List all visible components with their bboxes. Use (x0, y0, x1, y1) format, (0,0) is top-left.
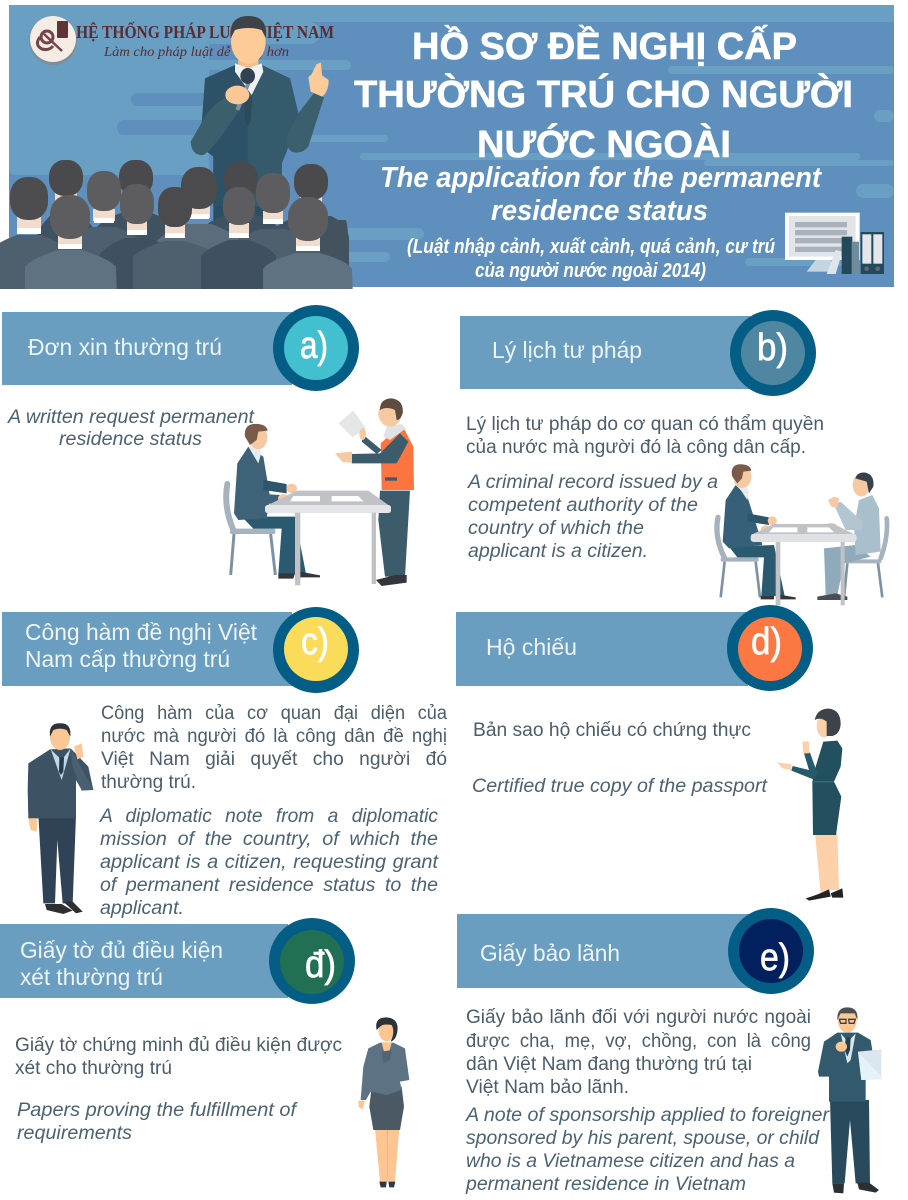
banner d (456, 612, 748, 686)
text b: country of which the (468, 518, 644, 539)
text đ: requirements (17, 1123, 133, 1144)
text c: mission of the country, of which the (100, 829, 438, 850)
badge đ (269, 918, 355, 1004)
logo (29, 16, 334, 65)
heading a: Đơn xin thường trú (28, 334, 222, 360)
badge c: c) (301, 621, 329, 663)
illustration: standing man in suit (28, 723, 93, 914)
text a: residence status (59, 429, 203, 450)
heading b: Lý lịch tư pháp (492, 337, 642, 363)
heading e: Giấy bảo lãnh (480, 940, 620, 966)
logo title: HỆ THỐNG PHÁP LUẬT VIỆT NAM (76, 21, 334, 42)
text c: applicant. (100, 898, 184, 919)
illustration: office interview a (226, 398, 414, 586)
text c: thường trú. (101, 772, 196, 793)
header panel (9, 5, 894, 287)
audience illustration (0, 160, 353, 289)
text e: Giấy bảo lãnh đối với người nước ngoài (466, 1007, 811, 1028)
icon: documents and binders (785, 213, 884, 274)
text c: of permanent residence status to the (100, 875, 438, 896)
panel: d) passport (456, 605, 843, 901)
text a: A written request permanent (7, 407, 255, 428)
audience back row (37, 160, 349, 266)
text e: Việt Nam bảo lãnh. (466, 1077, 629, 1098)
text e: who is a Vietnamese citizen and has a (466, 1151, 795, 1172)
text b: A criminal record issued by a (467, 472, 718, 493)
text d: Certified true copy of the passport (472, 776, 768, 797)
badge b: b) (757, 327, 788, 369)
text e: sponsored by his parent, spouse, or child (466, 1128, 820, 1149)
speaker illustration (191, 16, 329, 220)
text c: nước mà người đó là công dân đề nghị (101, 726, 447, 747)
legal reference: của người nước ngoài 2014) (475, 260, 706, 282)
heading d: Hộ chiếu (486, 634, 577, 660)
panel: đ) eligibility papers (0, 918, 409, 1187)
text b: Lý lịch tư pháp do cơ quan có thẩm quyền (466, 414, 824, 435)
panel: a) written request (2, 305, 414, 586)
heading đ (20, 937, 223, 990)
text e: A note of sponsorship applied to foreigner (465, 1105, 830, 1126)
title: HỒ SƠ ĐỀ NGHỊ CẤP (412, 24, 797, 68)
badge a (273, 305, 359, 391)
heading c (25, 619, 258, 672)
illustration: standing woman in jacket (358, 1017, 409, 1187)
heading đ: Giấy tờ đủ điều kiện (20, 937, 223, 963)
audience front row (25, 184, 353, 289)
text d: Bản sao hộ chiếu có chứng thực (473, 720, 751, 741)
text b: của nước mà người đó là công dân cấp. (466, 437, 806, 458)
legal reference: (Luật nhập cảnh, xuất cảnh, quá cảnh, cư trú (407, 236, 775, 258)
panel: e) note of sponsorship (457, 908, 881, 1195)
text e: được cha, mẹ, vợ, chồng, con là công (466, 1031, 811, 1052)
text c: applicant is a citizen, requesting grant (100, 852, 439, 873)
audience middle row (0, 167, 321, 299)
badge d (727, 605, 813, 691)
banner đ (0, 924, 288, 998)
text a (7, 407, 255, 450)
badge a: a) (300, 325, 328, 367)
badge đ: đ) (305, 944, 336, 986)
banner a (2, 312, 292, 385)
subtitle (380, 162, 822, 227)
badge d: d) (751, 621, 782, 663)
text đ (15, 1035, 342, 1144)
legal reference (407, 236, 775, 282)
text c: A diplomatic note from a diplomatic (99, 806, 439, 827)
text đ: xét cho thường trú (15, 1058, 172, 1079)
text c (99, 703, 447, 919)
badge b (730, 310, 816, 396)
illustration: two people at a table (717, 464, 887, 605)
banner b (460, 316, 750, 389)
subtitle: residence status (491, 195, 708, 227)
heading c: Nam cấp thường trú (25, 646, 230, 672)
text d (472, 720, 768, 797)
text đ: Giấy tờ chứng minh đủ điều kiện được (15, 1035, 342, 1056)
text b: applicant is a citizen. (468, 541, 648, 562)
logo badge (29, 16, 77, 65)
banner c (2, 612, 292, 686)
heading c: Công hàm đề nghị Việt (25, 619, 258, 645)
panel: c) diplomatic note (2, 607, 447, 919)
badge c (273, 607, 359, 693)
illustration: man with glasses holding paper (818, 1007, 881, 1193)
text c: Công hàm của cơ quan đại diện của (101, 703, 447, 724)
title: NƯỚC NGOÀI (477, 122, 731, 166)
subtitle: The application for the permanent (380, 162, 822, 194)
illustration: standing woman in dress (777, 709, 843, 901)
text b: competent authority of the (468, 495, 698, 516)
text e: dân Việt Nam đang thường trú tại (466, 1054, 752, 1075)
title (354, 24, 853, 166)
title: THƯỜNG TRÚ CHO NGƯỜI (354, 72, 853, 116)
text e: permanent residence in Vietnam (465, 1174, 746, 1195)
logo tagline: Làm cho pháp luật dễ dàng hơn (103, 45, 289, 60)
badge e (728, 908, 814, 994)
text đ: Papers proving the fulfillment of (17, 1100, 298, 1121)
badge e: e) (760, 937, 790, 979)
heading đ: xét thường trú (20, 964, 163, 990)
panel: b) criminal record (460, 310, 887, 605)
text e (465, 1007, 830, 1195)
text c: Việt Nam giải quyết cho người đó (101, 749, 447, 770)
text b (466, 414, 824, 562)
banner e (457, 914, 749, 988)
